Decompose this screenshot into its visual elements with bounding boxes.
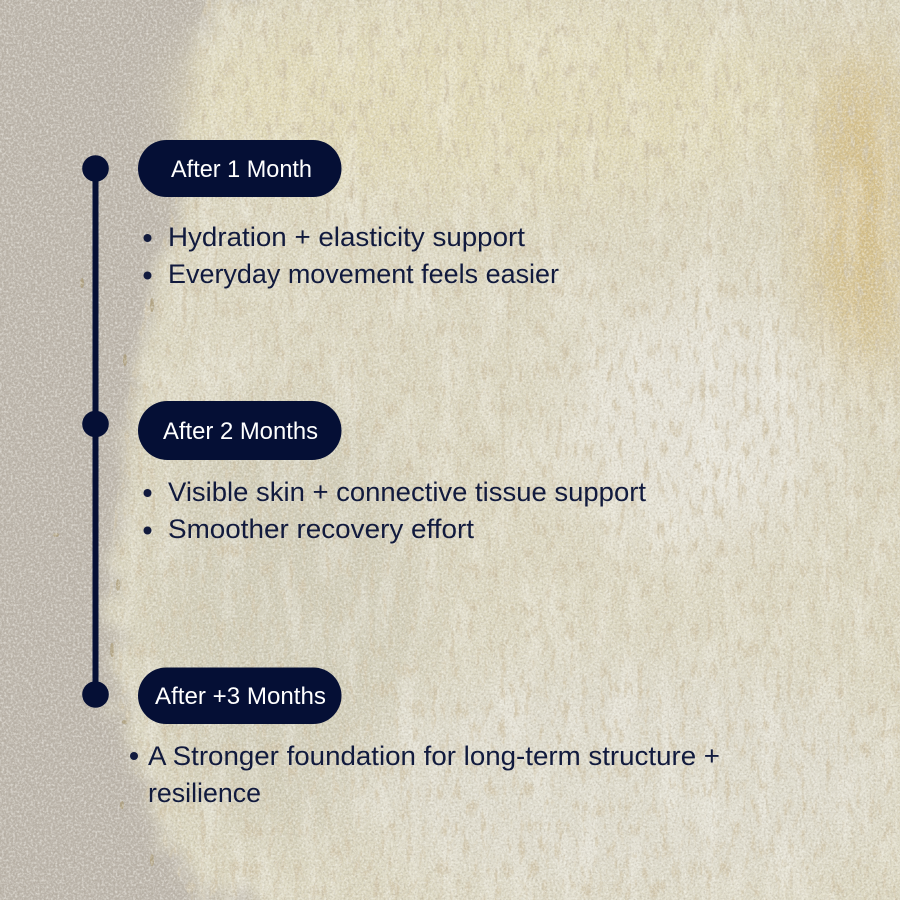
bullet list: month 2 benefits: Smoother recovery effort <box>168 514 475 544</box>
pill: After 2 Months <box>138 401 342 460</box>
section: after 1 month <box>138 140 559 289</box>
pill: After 1 Month <box>138 140 342 197</box>
bullet list: month 1 benefits: Everyday movement feels easier <box>168 259 559 289</box>
bullet list: month 1 benefits: Hydration + elasticity support <box>168 222 526 252</box>
bullet list: month 2 benefits <box>144 477 646 544</box>
bullet list: month 3 benefits: A Stronger foundation for long-term structure + <box>148 741 720 771</box>
pill: After +3 Months: After +3 Months <box>155 683 326 710</box>
timeline node: 2 months <box>82 411 109 437</box>
timeline node: 1 month <box>82 155 109 182</box>
bullet list: month 3 benefits: resilience <box>148 778 261 808</box>
bullet list: month 1 benefits <box>144 222 559 289</box>
bullet list: month 3 benefits <box>130 741 720 808</box>
powder flecks <box>53 278 154 866</box>
pill: After +3 Months <box>138 668 342 724</box>
timeline <box>82 155 109 708</box>
pill: After 2 Months: After 2 Months <box>163 418 318 445</box>
section: after 3 months <box>130 668 720 808</box>
pill: After 1 Month: After 1 Month <box>171 156 312 183</box>
bullet list: month 2 benefits: Visible skin + connective tissue support <box>168 477 646 507</box>
section: after 2 months <box>138 401 646 544</box>
timeline line <box>92 168 98 695</box>
timeline node: 3 months <box>82 681 109 708</box>
